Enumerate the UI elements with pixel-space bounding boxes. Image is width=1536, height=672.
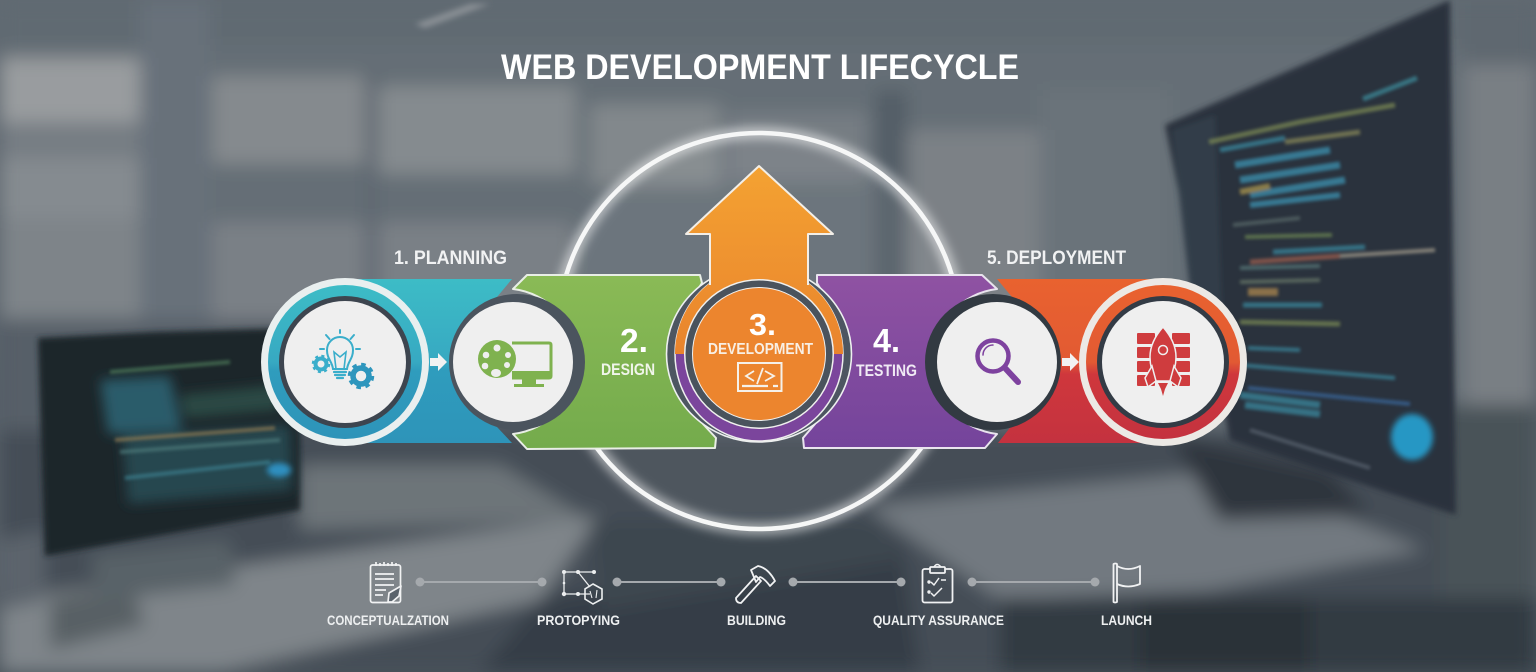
- icon: film reel and monitor: [478, 340, 551, 387]
- large glowing ring: [558, 133, 960, 529]
- arrow: testing to deployment: [1062, 353, 1079, 371]
- label: 2. Design: [601, 322, 655, 379]
- label: 3. Development: [708, 307, 813, 358]
- label: 4. Testing: [856, 322, 917, 380]
- label: 2. Design: 2.: [620, 322, 648, 359]
- icon: hammer: [736, 566, 775, 603]
- label: 3. Development: 3.: [749, 307, 776, 342]
- icon: code window: [738, 363, 782, 391]
- panel: design: [513, 275, 716, 449]
- label: 1. Planning: 1. PLANNING: [394, 248, 507, 269]
- icon: magnifier: [978, 340, 1018, 382]
- circle: testing: [925, 294, 1061, 430]
- circle: planning: [261, 278, 429, 446]
- timeline label: conceptualization: CONCEPTUALZATION: [327, 612, 449, 628]
- timeline label: launch: LAUNCH: [1101, 612, 1152, 628]
- icon: lightbulb and gears: [313, 330, 372, 388]
- timeline label: building: BUILDING: [727, 612, 786, 628]
- icon: flag: [1114, 564, 1140, 602]
- icon: prototype wireframe: [562, 570, 602, 604]
- panel: testing: [803, 275, 997, 448]
- panel: planning band: [345, 279, 512, 443]
- label: 3. Development: DEVELOPMENT: [708, 341, 813, 358]
- timeline connectors: [416, 578, 1100, 586]
- label: 4. Testing: 4.: [873, 322, 900, 359]
- circle: deployment: [1079, 278, 1247, 446]
- label: 2. Design: DESIGN: [601, 361, 655, 379]
- label: 5. Deployment: 5. DEPLOYMENT: [987, 248, 1126, 269]
- timeline label: quality assurance: QUALITY ASSURANCE: [873, 612, 1004, 628]
- arrow: planning to design: [430, 353, 447, 371]
- panel: development arrow and rings: [666, 166, 852, 442]
- title: WEB DEVELOPMENT LIFECYCLE: [501, 48, 1019, 87]
- label: 4. Testing: TESTING: [856, 362, 917, 380]
- icon: rocket and servers: [1137, 327, 1190, 396]
- timeline label: prototyping: PROTOPYING: [537, 612, 620, 628]
- icon: clipboard checklist: [922, 564, 952, 602]
- icon: notepad: [370, 562, 401, 602]
- circle: design: [449, 294, 585, 430]
- panel: deployment band: [997, 279, 1163, 443]
